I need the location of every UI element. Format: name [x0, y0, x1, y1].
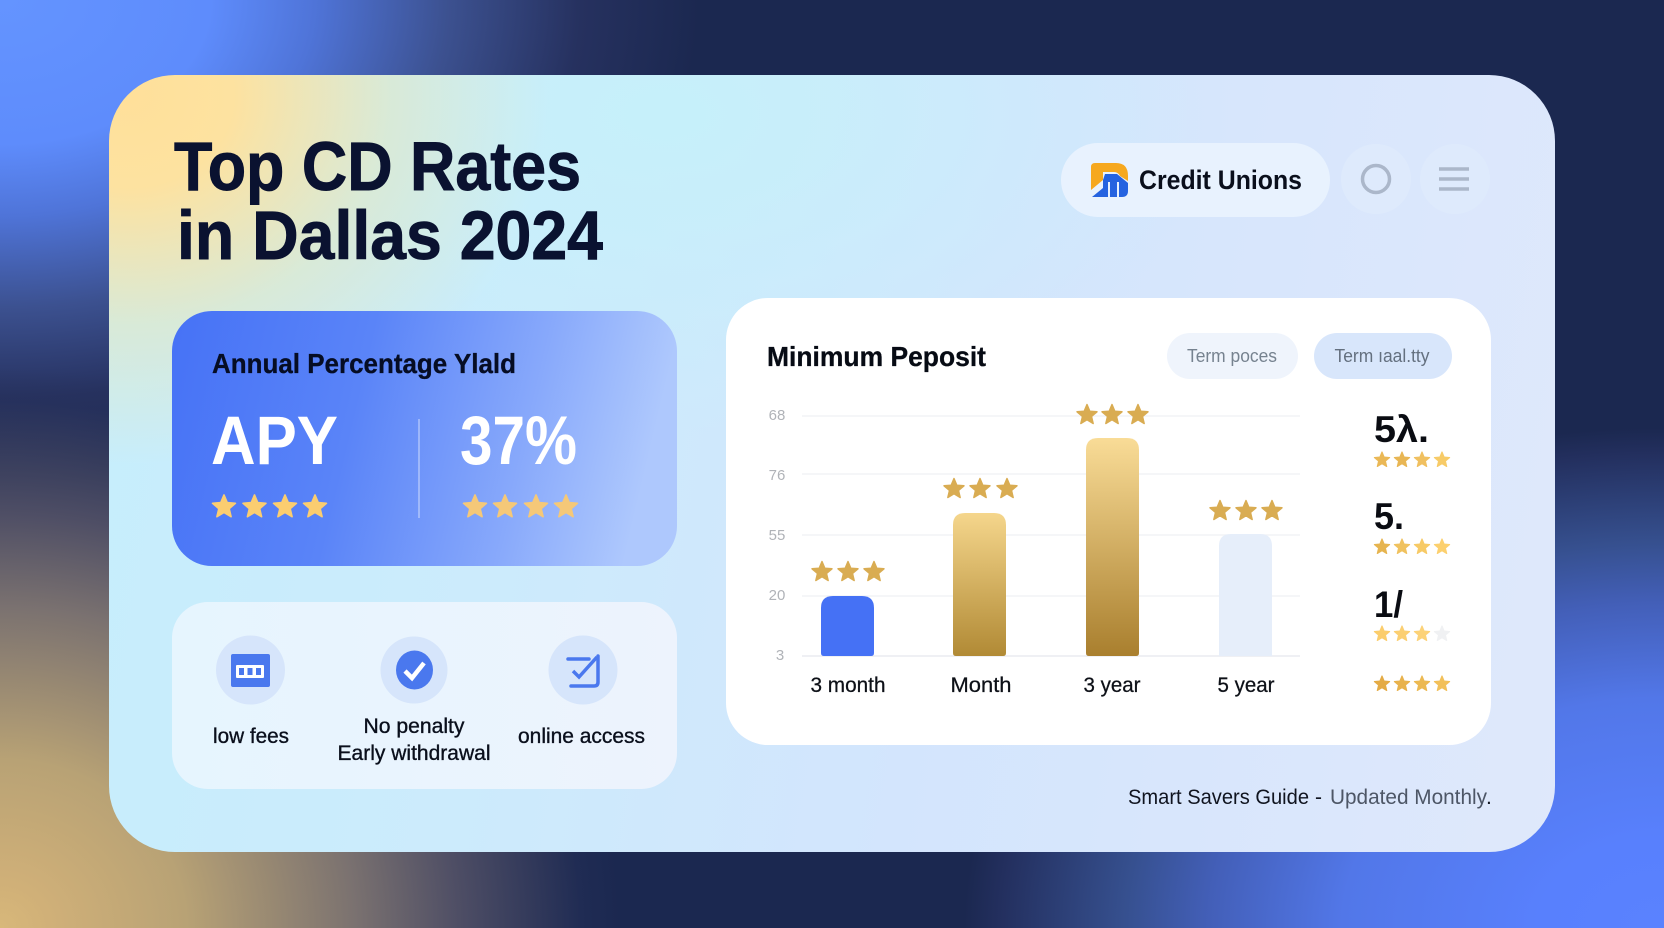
feature: online access: online access [518, 725, 645, 748]
footer note: - [1315, 786, 1322, 809]
y axis labels: 68 [769, 407, 785, 424]
footer note: Smart Savers Guide [1128, 786, 1309, 809]
chart heading: Minimum Peposit [767, 341, 986, 372]
filter pill: term poces: Term poces [1187, 346, 1277, 366]
footer note [1128, 786, 1492, 809]
side ratings: 1/ [1374, 584, 1403, 625]
side ratings [1374, 409, 1450, 690]
stars: value [464, 495, 577, 517]
bar chart [769, 404, 1300, 697]
icon: circle button [1341, 144, 1411, 214]
bar: 3 year [1086, 438, 1139, 656]
feature: low fees: low fees [213, 725, 289, 748]
x axis labels [810, 674, 1274, 697]
feature: no penalty: No penalty [364, 715, 465, 738]
footer note: Updated Monthly [1330, 786, 1487, 809]
panel: minimum deposit chart [726, 298, 1491, 745]
feature: low fees [213, 636, 289, 748]
title: Top CD Rates [174, 128, 581, 205]
divider [418, 419, 420, 518]
stars above bars [812, 404, 1282, 580]
stars: APY [213, 495, 326, 517]
x axis labels: 3 year [1084, 674, 1140, 697]
panel heading: Annual Percentage Ylald [212, 348, 516, 379]
title [174, 128, 603, 274]
y axis labels [769, 407, 785, 664]
icon: menu button [1420, 144, 1490, 214]
filter pill: term ialty [1314, 333, 1452, 379]
y axis labels: 76 [769, 467, 785, 484]
feature: online access [518, 636, 645, 748]
title: in Dallas 2024 [177, 197, 603, 274]
icon: credit union logo [1091, 163, 1128, 197]
y axis labels: 55 [769, 527, 785, 544]
x axis labels: Month [950, 674, 1012, 697]
panel: annual percentage yield [172, 311, 677, 566]
APY label: APY [211, 402, 338, 479]
y axis labels: 20 [769, 587, 785, 604]
APY value: 37% [460, 402, 577, 479]
footer note: . [1486, 786, 1492, 809]
filter pill: term poces [1167, 333, 1298, 379]
panel: features [172, 602, 677, 789]
feature: no penalty: Early withdrawal [338, 742, 490, 765]
side ratings: 5. [1374, 496, 1404, 537]
bar: month [953, 513, 1006, 656]
feature: no penalty [338, 636, 490, 765]
panel: main card [109, 75, 1555, 852]
x axis labels: 5 year [1218, 674, 1274, 697]
x axis labels: 3 month [810, 674, 886, 697]
bar: 3 month [821, 596, 874, 656]
credit unions pill [1061, 143, 1330, 217]
y axis labels: 3 [776, 647, 784, 664]
pill label: Credit Unions [1139, 165, 1302, 195]
filter pill: term ialty: Term ıaal.tty [1334, 346, 1430, 366]
bar: 5 year [1219, 534, 1272, 656]
side ratings: 5λ. [1374, 409, 1429, 450]
